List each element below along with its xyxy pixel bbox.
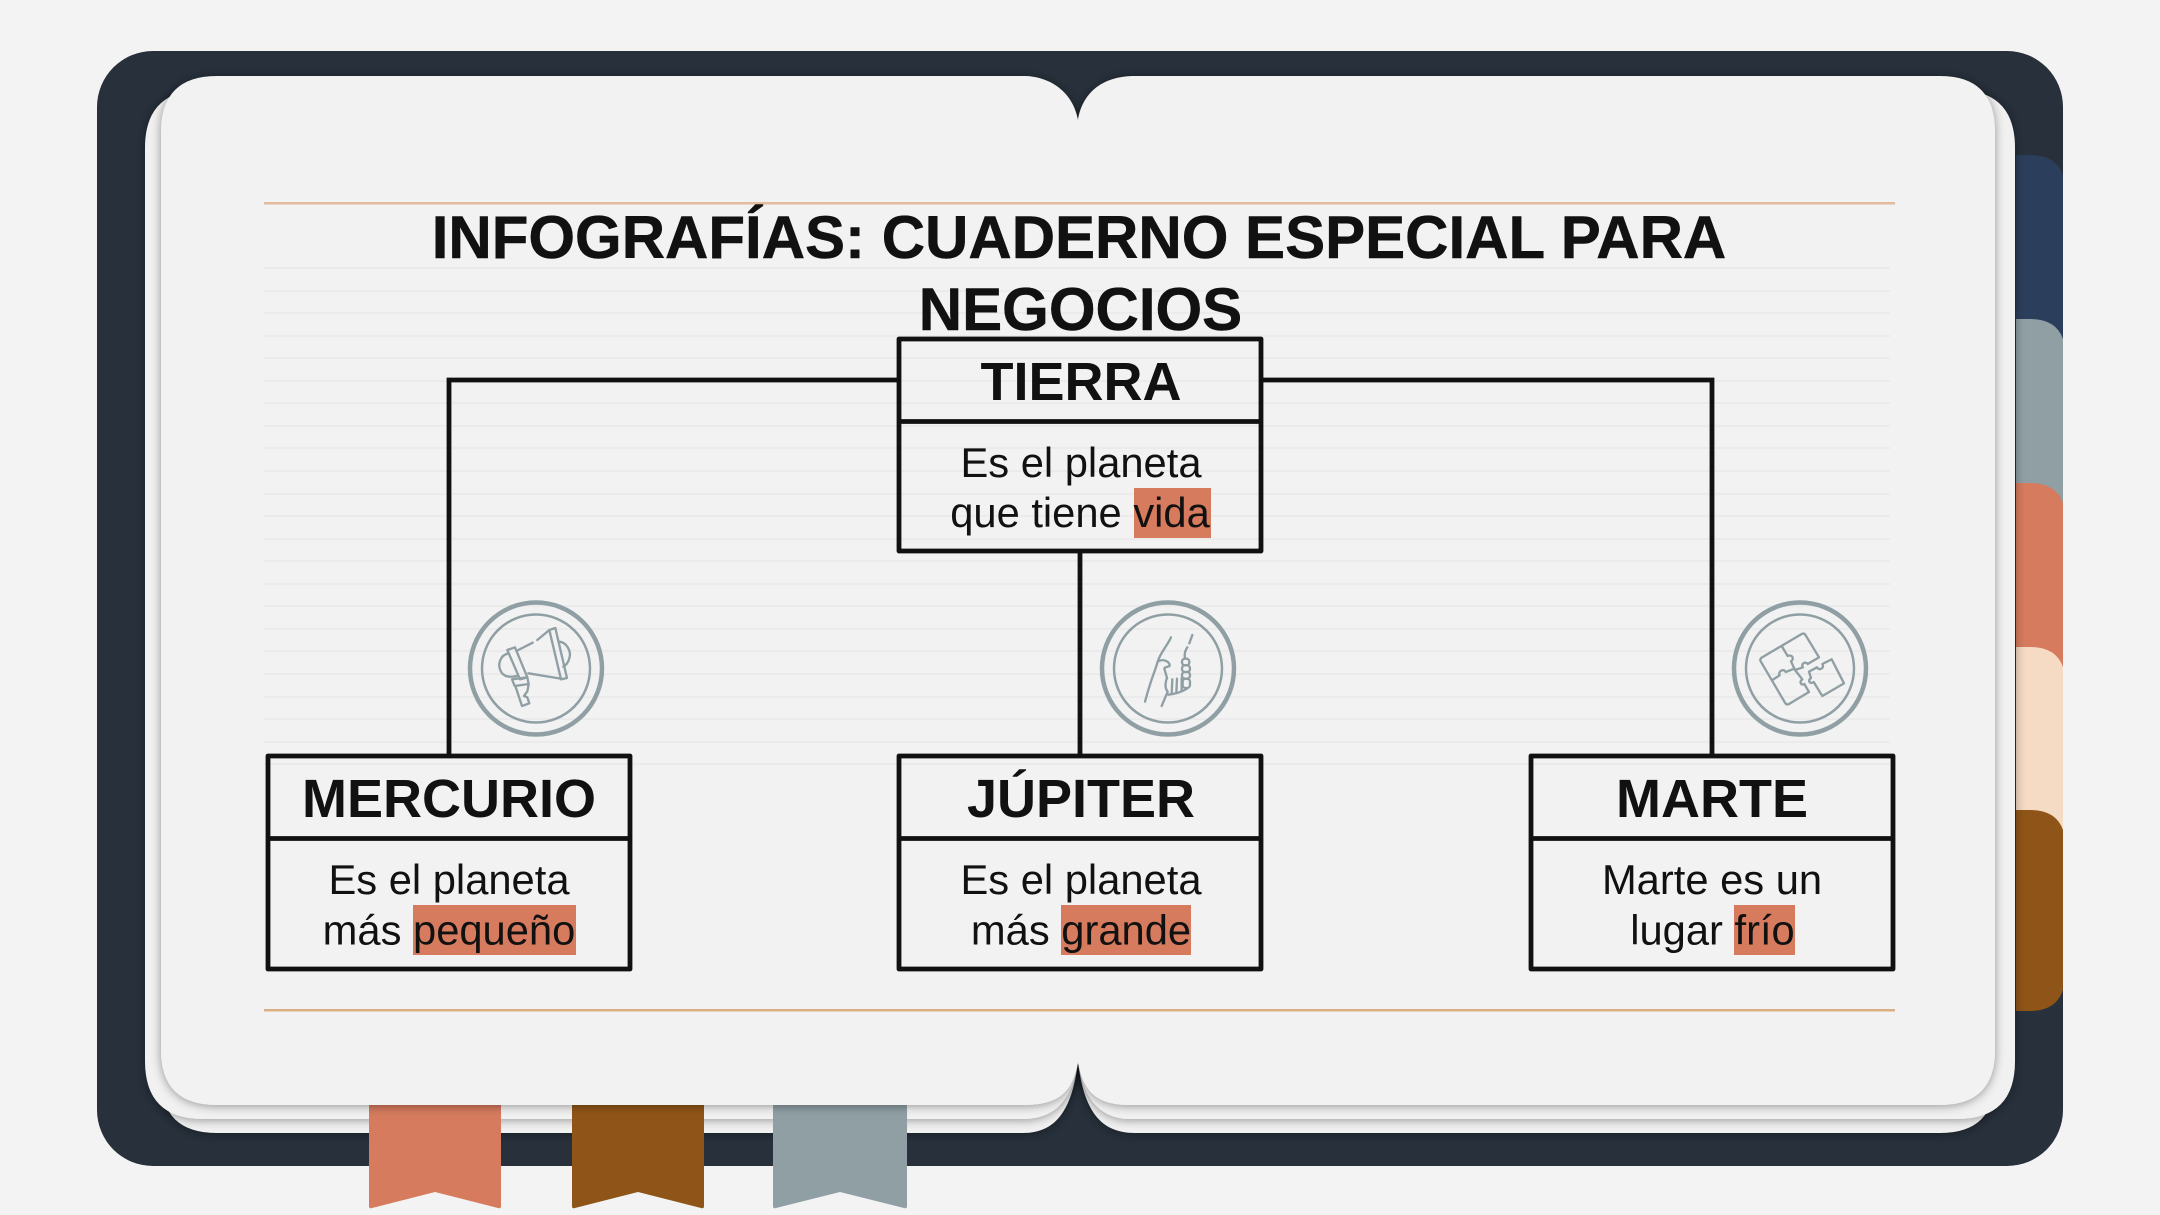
node: Marte [1531,756,1893,969]
icon: megaphone [470,602,602,734]
connector lines [449,380,1712,754]
icon: helping hands [1102,602,1234,734]
node: Mercurio: MERCURIO [302,769,596,829]
node: Marte: lugar frío [1630,906,1795,954]
top rule [264,202,1895,204]
bookmarks [369,1085,907,1208]
index tabs [2016,155,2063,1011]
top page [161,76,1995,1105]
bookmark: brown [572,1085,704,1208]
node: Tierra: que tiene vida [950,489,1211,536]
node: Mercurio: Es el planeta [328,856,570,903]
middle page layer [145,90,2015,1119]
node: Tierra [899,339,1261,551]
bookmark: grey [773,1085,907,1208]
title: INFOGRAFÍAS: CUADERNO ESPECIAL PARA [432,204,1726,271]
node: Júpiter: más grande [971,906,1191,954]
node: Tierra: Es el planeta [960,439,1202,486]
node: Marte: Marte es un [1602,856,1822,903]
node: Júpiter [899,756,1261,969]
title [432,204,1726,343]
node: Tierra: TIERRA [980,352,1182,412]
title: NEGOCIOS [919,276,1242,343]
icon: puzzle [1734,602,1866,734]
bookmark: orange [369,1085,501,1208]
back page layer [161,104,1995,1133]
bottom rule [264,1009,1895,1012]
node: Marte: MARTE [1616,769,1808,829]
node: Mercurio [268,756,630,969]
node: Mercurio: más pequeño [323,906,575,954]
node: Júpiter: Es el planeta [960,856,1202,903]
node: Júpiter: JÚPITER [967,769,1195,829]
